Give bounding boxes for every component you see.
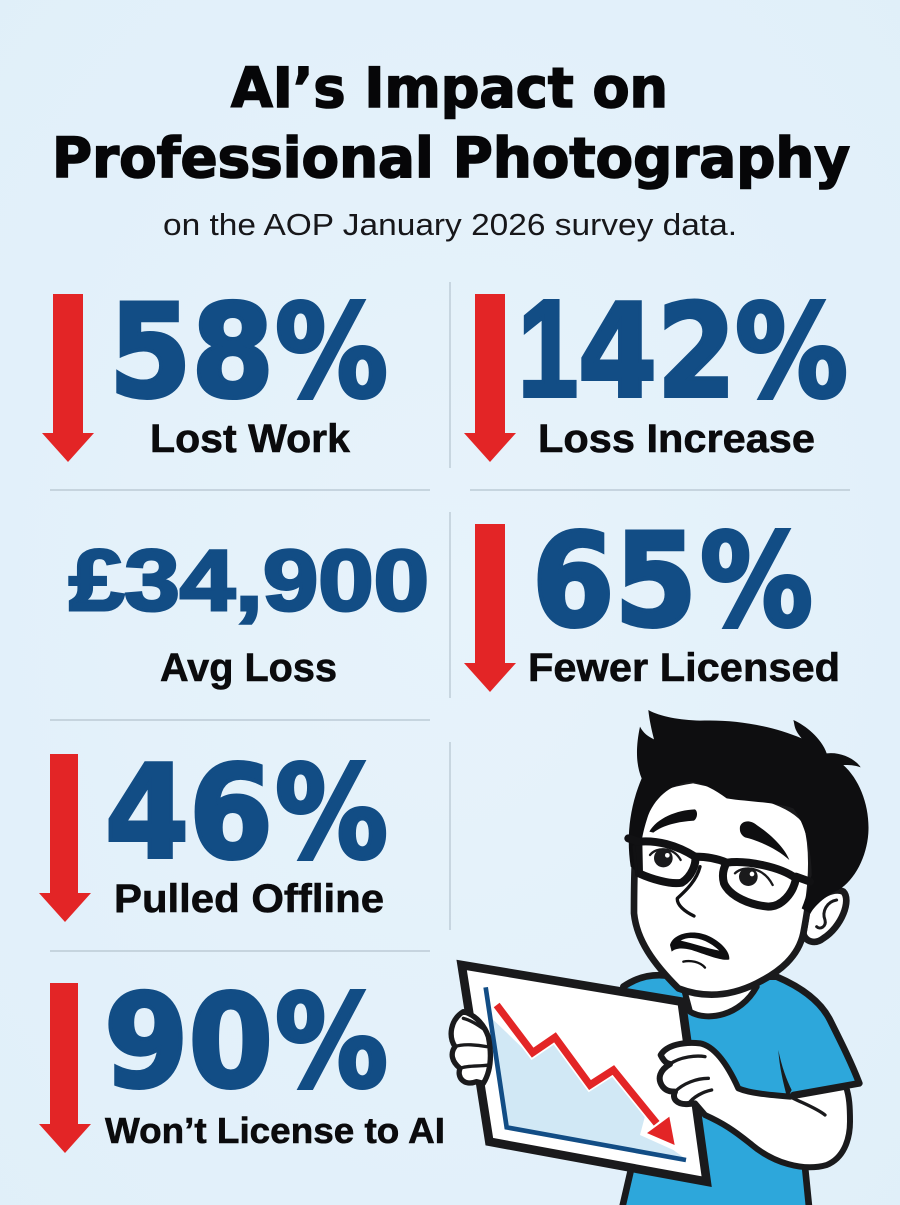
label: avg loss: Avg Loss: [160, 646, 337, 690]
eyebrow left: [649, 809, 697, 833]
ear: [803, 890, 846, 942]
eyebrow right: [740, 821, 789, 860]
chart paper: [462, 965, 707, 1182]
value: 65%: %: [700, 507, 813, 656]
value: 90%: %: [275, 968, 388, 1117]
mouth: [670, 933, 729, 960]
hair: [629, 710, 869, 913]
value: 58%: %: [275, 278, 388, 427]
front hand and arm: [660, 1043, 850, 1167]
value: 65%: 65: [532, 507, 697, 656]
label: fewer licensed: Fewer Licensed: [528, 646, 840, 690]
value: 142%: [518, 272, 848, 427]
face: [634, 780, 811, 995]
subtitle: on the AOP January 2026 survey data.: [163, 207, 737, 242]
glasses: [628, 838, 810, 907]
arrow: down 90%: [39, 983, 91, 1153]
stat: 90% won't license to AI: [39, 968, 445, 1153]
stat: 142% loss increase: [464, 272, 848, 462]
sleeve fold: [778, 1050, 792, 1098]
stat: £34,900 average loss: [69, 533, 429, 690]
chart axes: [486, 987, 686, 1160]
value: 142%: 42: [578, 278, 736, 427]
value: £34,900: £34,900: [69, 533, 429, 629]
title: [52, 56, 850, 190]
value: 58%: 58: [109, 278, 274, 427]
label: won't license to AI: Won’t License to AI: [105, 1110, 445, 1151]
label: pulled offline: Pulled Offline: [114, 877, 384, 921]
left lens: [638, 841, 695, 883]
title: AI’s Impact on: [231, 56, 668, 120]
value: 142%: 1: [518, 272, 578, 426]
arrow: down 142%: [464, 294, 516, 462]
stat: 46% pulled offline: [39, 739, 388, 922]
stat: 58% lost work: [42, 278, 388, 462]
value: 65%: [532, 507, 813, 656]
stat: 65% fewer licensed: [464, 507, 840, 692]
illustration: worried photographer holding falling chart: [451, 710, 869, 1205]
value: 58%: [109, 278, 388, 427]
bridge and temples: [628, 838, 810, 882]
arrow: down 46%: [39, 754, 91, 922]
title: Professional Photography: [52, 126, 850, 190]
arrow: down 58%: [42, 294, 94, 462]
back hand: [451, 1012, 490, 1083]
label: loss increase: Loss Increase: [538, 417, 815, 461]
value: 46%: %: [275, 739, 388, 888]
neck: [683, 987, 757, 1016]
value: 90%: [104, 968, 388, 1117]
finger lines: [455, 1018, 825, 1115]
eye left: [654, 849, 673, 867]
nose: [677, 867, 700, 916]
value: 142%: %: [735, 278, 848, 427]
value: 90%: 90: [104, 968, 273, 1117]
value: 46%: 46: [105, 739, 273, 888]
shirt: [622, 975, 859, 1205]
label: lost work: Lost Work: [150, 417, 351, 461]
arrow: down 65%: [464, 524, 516, 692]
chart area: [490, 1017, 685, 1158]
right lens: [723, 862, 796, 907]
falling line and arrowhead: [497, 1005, 676, 1147]
value: 46%: [105, 739, 388, 888]
eye right: [739, 867, 758, 886]
